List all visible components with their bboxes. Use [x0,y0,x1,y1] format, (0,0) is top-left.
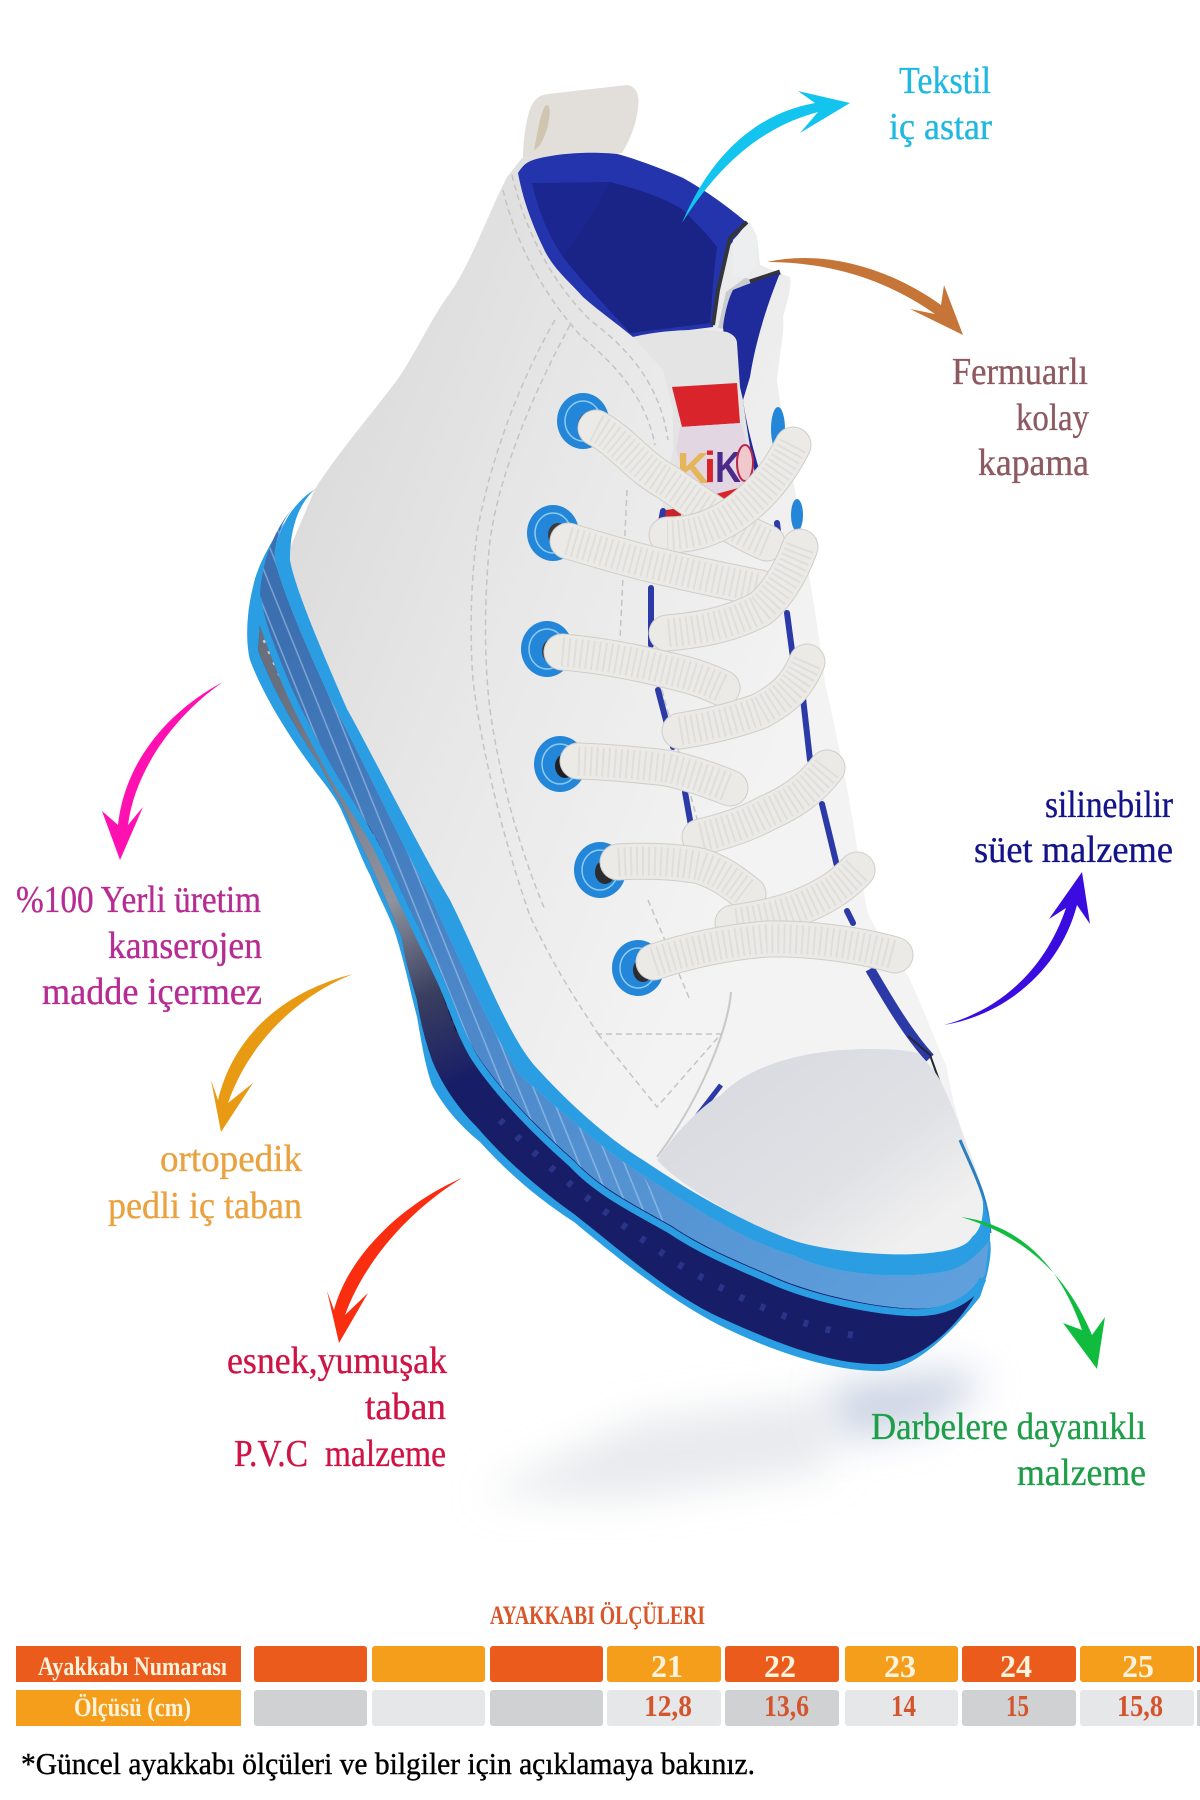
header: size in cm: Ölçüsü (cm) [74,1693,191,1722]
header: size in cm [16,1690,241,1726]
label: durable [871,1406,1146,1494]
label: local production: madde içermez [42,971,262,1013]
size number row: 22 [764,1648,796,1684]
header: shoe number [16,1646,241,1682]
footnote: *Güncel ayakkabı ölçüleri ve bilgiler için açıklamaya bakınız. [21,1746,755,1781]
sole heel translucent section [258,600,476,1126]
toe cap [657,1049,983,1254]
measurement row: 15 [1006,1688,1029,1723]
size number row: 24 [1000,1648,1032,1684]
header: shoe number: Ayakkabı Numarası [38,1652,227,1681]
white laces [562,428,895,962]
right collar flap lining [723,273,780,492]
label: sole: esnek,yumuşak [227,1340,447,1382]
tongue label: K [715,443,741,492]
arrow: magenta [102,682,223,860]
label: suede [974,784,1173,871]
arrow: purple [944,872,1090,1025]
sole navy layer [258,600,985,1364]
label: insole: ortopedik [160,1138,302,1180]
label: sole: P.V.C malzeme [234,1433,446,1475]
sole translucent blue band [260,500,990,1309]
shoe: high-top sneaker [247,85,991,1500]
sole navy dots [500,1120,870,1338]
label: lining: Tekstil [899,60,991,102]
label: durable: Darbelere dayanıklı [871,1406,1146,1448]
size number row [254,1646,1200,1684]
arrow: green [961,1217,1105,1369]
arrow: brown to zipper [767,258,963,335]
sole lower blue stripe [258,598,983,1313]
sole top blue stripe [275,489,990,1275]
pull tab [523,85,639,160]
label: zipper: kolay [1016,397,1089,439]
label: insole [108,1138,302,1227]
size number row: 21 [651,1648,683,1684]
measurement row: 15,8 [1117,1688,1163,1723]
tongue [633,330,757,515]
label: lining: iç astar [889,106,992,148]
label: zipper: kapama [978,442,1089,484]
label: durable: malzeme [1017,1452,1146,1494]
upper body [285,153,975,1240]
blue textile lining [518,153,747,337]
arrow: cyan to lining [682,91,850,223]
size table [16,1601,1200,1726]
label: lining [889,60,992,148]
sole outer edge [247,491,991,1371]
label: suede: süet malzeme [974,829,1173,871]
tongue label [664,383,757,520]
ground shadow [480,1370,985,1500]
arrow: orange [211,974,353,1132]
label: zipper: Fermuarlı [952,351,1088,393]
label: local production: kanserojen [108,925,262,967]
tongue label: i [704,443,716,492]
size table title: AYAKKABI ÖLÇÜLERI [490,1601,705,1630]
measurement row: 13,6 [764,1688,809,1723]
label: local production: %100 Yerli üretim [16,879,261,921]
blue front trim [651,511,940,1158]
label: sole [227,1340,447,1475]
label: local production [16,879,262,1013]
label: insole: pedli iç taban [108,1185,302,1227]
measurement row: 12,8 [644,1688,692,1723]
zipper [713,222,780,330]
metal eyelets [521,393,803,996]
measurement row [254,1688,1200,1726]
measurement row: 14 [891,1688,916,1723]
stitching [471,175,731,1157]
label: zipper [952,351,1089,484]
label: suede: silinebilir [1045,784,1173,826]
arrow: red [327,1178,462,1343]
size number row: 23 [884,1648,916,1684]
size number row: 25 [1122,1648,1154,1684]
label: sole: taban [365,1386,446,1428]
tongue label: K [677,444,709,493]
